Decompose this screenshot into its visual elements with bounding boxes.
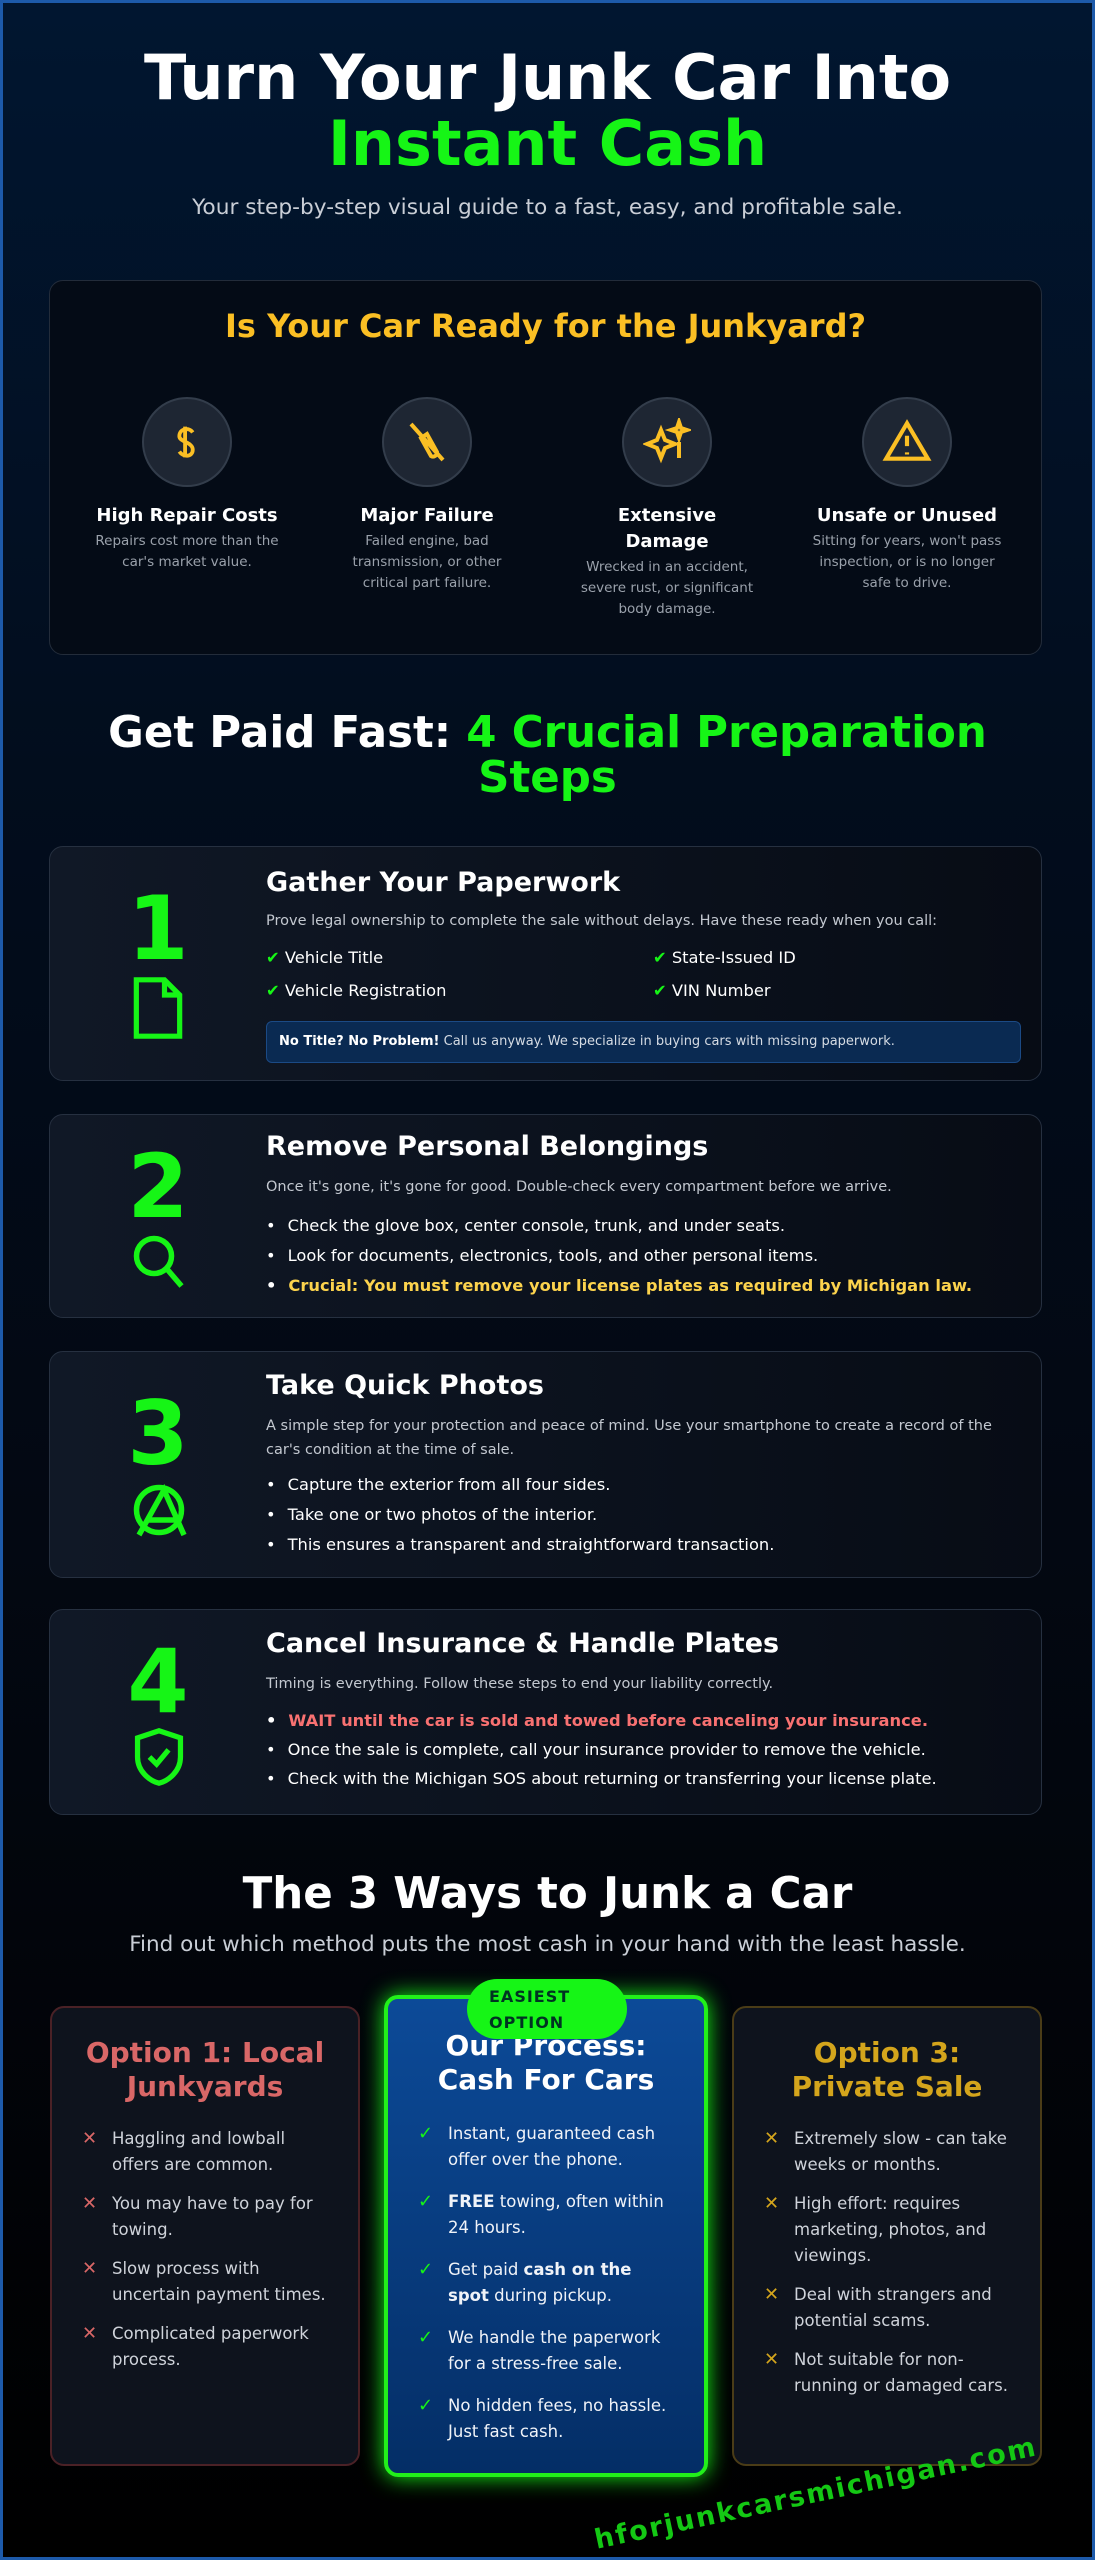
subtitle: Your step-by-step visual guide to a fast, easy, and profitable sale. — [192, 195, 903, 220]
option 1 card: Complicated paperwork process. — [112, 2324, 309, 2369]
step 1 card — [49, 846, 1042, 1081]
step 4 card — [49, 1609, 1042, 1815]
bullet list: Look for documents, electronics, tools, and other personal items. — [288, 1246, 818, 1265]
badge: easiest option: OPTION — [489, 2013, 564, 2032]
option 3 card: Deal with strangers and potential scams. — [794, 2285, 992, 2330]
bullet list — [268, 1711, 937, 1788]
feature: high repair costs: High Repair Costs — [96, 505, 278, 526]
step 3 card — [49, 1351, 1042, 1578]
step title: Cancel Insurance & Handle Plates — [266, 1628, 779, 1659]
section heading: preparation steps — [108, 708, 987, 803]
option 1 card: Option 1: Local — [86, 2036, 324, 2069]
step 3 card: A simple step for your protection and peace of mind. Use your smartphone to create a record of the car's condition at the time of sale. — [266, 1418, 992, 1458]
option 2 card (highlight) — [384, 1995, 708, 2477]
step title: Remove Personal Belongings — [266, 1131, 708, 1162]
bullet list: Check with the Michigan SOS about returning or transferring your license plate. — [288, 1769, 937, 1788]
option 1 card: Junkyards — [127, 2070, 283, 2103]
option 3 card: Option 3: — [814, 2036, 960, 2069]
icon: shield check — [134, 1728, 184, 1786]
step number 4: 4 — [127, 1630, 189, 1733]
step 1 card: ✔ VIN Number — [653, 981, 771, 1000]
option 1 card: ✕ — [82, 2128, 97, 2149]
option 2 card (highlight): Get paid cash on the spot during pickup. — [448, 2260, 631, 2305]
title: Instant Cash — [328, 107, 767, 180]
step 2 card — [49, 1114, 1042, 1318]
feature: unsafe or unused: inspection, or is no longer — [819, 554, 995, 570]
option 3 card — [732, 2006, 1042, 2466]
feature: high repair costs: Repairs cost more than the — [95, 533, 279, 549]
feature: extensive damage: severe rust, or significant — [581, 580, 753, 596]
step 1 card: ✔ Vehicle Registration — [266, 981, 446, 1000]
feature: unsafe or unused: Sitting for years, won't pass — [813, 533, 1001, 549]
callout: no title: No Title? No Problem! Call us anyway. We specialize in buying cars with missing paperwork. — [279, 1034, 895, 1049]
option 1 card: You may have to pay for towing. — [112, 2194, 313, 2239]
feature: extensive damage: Damage — [625, 531, 709, 552]
step 1 card: ✔ Vehicle Title — [266, 948, 383, 967]
section heading: preparation steps: Get Paid Fast: 4 Crucial Preparation — [108, 708, 987, 758]
badge: easiest option: EASIEST — [489, 1987, 570, 2006]
option 2 card (highlight): Our Process: — [446, 2029, 646, 2062]
option 2 card (highlight): We handle the paperwork for a stress-free sale. — [448, 2328, 660, 2373]
feature: major failure: transmission, or other — [353, 554, 501, 570]
icon: document — [134, 977, 182, 1039]
feature: extensive damage: body damage. — [618, 601, 716, 617]
section subtitle: Find out which method puts the most cash in your hand with the least hassle. — [129, 1932, 966, 1957]
option 2 card (highlight): Instant, guaranteed cash offer over the phone. — [448, 2124, 655, 2169]
bullet list: Capture the exterior from all four sides. — [288, 1475, 610, 1494]
icon: magnifier — [134, 1236, 184, 1288]
step 1 card: ✔ State-Issued ID — [653, 948, 796, 967]
bullet list: Crucial: You must remove your license plates as required by Michigan law. — [288, 1276, 972, 1295]
option 2 card (highlight): ✓ — [418, 2395, 433, 2416]
checklist — [266, 948, 796, 1000]
feature: unsafe or unused — [813, 397, 1001, 591]
feature: extensive damage: Wrecked in an accident, — [586, 559, 748, 575]
feature: high repair costs: car's market value. — [122, 554, 252, 570]
option 1 card: Haggling and lowball offers are common. — [112, 2129, 285, 2174]
step title: Take Quick Photos — [266, 1370, 544, 1401]
option 2 card (highlight): Cash For Cars — [438, 2063, 654, 2096]
feature: unsafe or unused: safe to drive. — [863, 575, 951, 591]
option 1 card: Slow process with uncertain payment times. — [112, 2259, 326, 2304]
bullet list: WAIT until the car is sold and towed before canceling your insurance. — [288, 1711, 928, 1730]
bullet list: Take one or two photos of the interior. — [288, 1505, 597, 1524]
callout: no title — [266, 1021, 1021, 1063]
feature: unsafe or unused: Unsafe or Unused — [817, 505, 997, 526]
feature: major failure: Major Failure — [360, 505, 494, 526]
bullet list — [268, 1475, 774, 1554]
bullet list: Check the glove box, center console, trunk, and under seats. — [288, 1216, 785, 1235]
option 2 card (highlight): ✓ — [418, 2327, 433, 2348]
step title: Gather Your Paperwork — [266, 867, 620, 898]
bullet list — [268, 1216, 972, 1295]
section heading: preparation steps: Steps — [478, 753, 617, 803]
step 2 card: Once it's gone, it's gone for good. Double-check every compartment before we arrive. — [266, 1179, 892, 1195]
feature: major failure — [352, 397, 502, 591]
option 2 card (highlight): ✓ — [418, 2191, 433, 2212]
step 1 card: Prove legal ownership to complete the sale without delays. Have these ready when you call: — [266, 913, 937, 929]
option 2 card (highlight): FREE towing, often within 24 hours. — [448, 2192, 664, 2237]
option 3 card: ✕ — [764, 2284, 779, 2305]
option 1 card: ✕ — [82, 2193, 97, 2214]
panel: junkyard readiness — [49, 280, 1042, 655]
feature: extensive damage: Extensive — [618, 505, 716, 526]
bullet list: This ensures a transparent and straightforward transaction. — [288, 1535, 774, 1554]
badge: easiest option — [467, 1979, 627, 2039]
feature: major failure: critical part failure. — [363, 575, 491, 591]
option 1 card: ✕ — [82, 2258, 97, 2279]
title — [144, 41, 951, 180]
section heading: 3 ways: The 3 Ways to Junk a Car — [243, 1869, 852, 1919]
option 3 card: Not suitable for non-running or damaged cars. — [794, 2350, 1008, 2395]
feature: major failure: Failed engine, bad — [365, 533, 489, 549]
icon: camera-off — [134, 1484, 186, 1536]
feature: extensive damage — [581, 397, 753, 617]
option 3 card: ✕ — [764, 2193, 779, 2214]
watermark url: hforjunkcarsmichigan.com — [592, 2431, 1040, 2556]
title: Turn Your Junk Car Into — [144, 41, 951, 114]
step 4 card: Timing is everything. Follow these steps to end your liability correctly. — [266, 1676, 773, 1692]
step number 1: 1 — [127, 877, 189, 980]
option 3 card: High effort: requires marketing, photos, and viewings. — [794, 2194, 986, 2265]
option 3 card: ✕ — [764, 2349, 779, 2370]
option 1 card: ✕ — [82, 2323, 97, 2344]
bullet list: Once the sale is complete, call your insurance provider to remove the vehicle. — [288, 1740, 926, 1759]
option 2 card (highlight): No hidden fees, no hassle. Just fast cash. — [448, 2396, 666, 2441]
panel heading: Is Your Car Ready for the Junkyard? — [225, 307, 866, 345]
option 2 card (highlight): ✓ — [418, 2259, 433, 2280]
step number 3: 3 — [127, 1382, 189, 1485]
option 3 card: Private Sale — [792, 2070, 982, 2103]
option 3 card: Extremely slow - can take weeks or months. — [794, 2129, 1007, 2174]
step number 2: 2 — [127, 1135, 189, 1238]
feature: high repair costs — [95, 397, 279, 570]
option 2 card (highlight): ✓ — [418, 2123, 433, 2144]
option 3 card: ✕ — [764, 2128, 779, 2149]
option 1 card — [50, 2006, 360, 2466]
